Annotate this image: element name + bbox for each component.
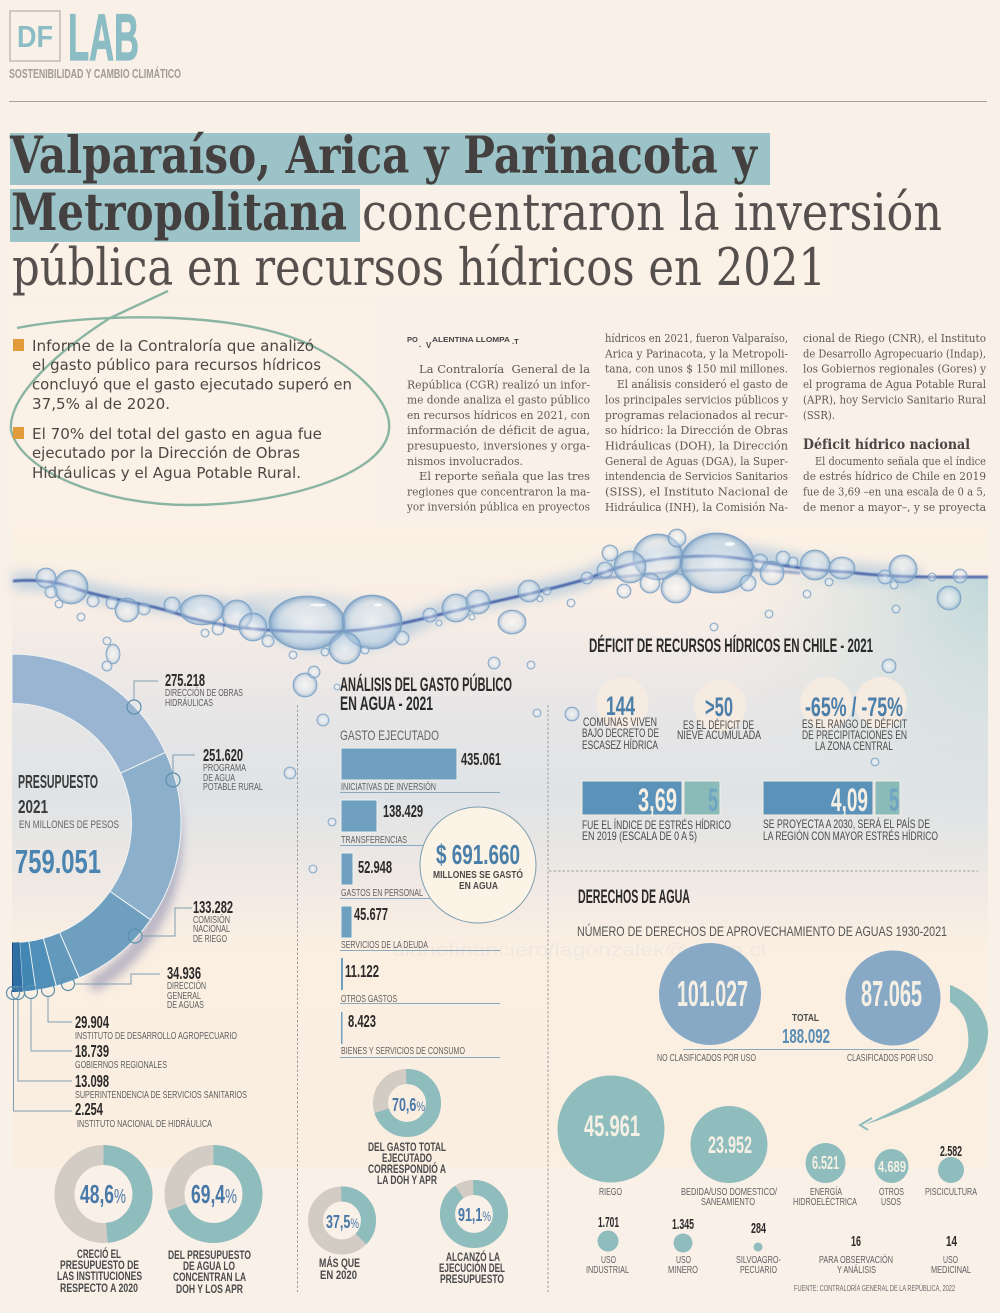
callout: Dirección General de Aguas: DE AGUAS bbox=[167, 999, 204, 1011]
callout: Superintendencia de Servicios Sanitarios bbox=[12, 986, 247, 1101]
bubble chart: water rights by use: MINERO bbox=[668, 1264, 698, 1276]
panel: déficit de recursos hídricos bbox=[582, 635, 907, 753]
chart: budget half donut: EN MILLONES DE PESOS bbox=[19, 819, 119, 831]
article column 1: . bbox=[419, 340, 421, 349]
title bbox=[9, 126, 942, 298]
article column 3: Déficit hídrico nacional bbox=[803, 437, 970, 453]
stress index bar 2019: 5 bbox=[708, 782, 718, 818]
heading: análisis del gasto público: ANÁLISIS DEL GASTO PÚBLICO bbox=[340, 674, 512, 696]
article column 1: ALENTINA LLOMPA bbox=[432, 335, 511, 344]
donut: 48,6%: 48,6% bbox=[80, 1179, 126, 1209]
bubble chart: water rights by use: USO bbox=[943, 1254, 958, 1266]
donut: 70,6%: 70,6% bbox=[392, 1095, 425, 1115]
panel: déficit de recursos hídricos: NIEVE ACUMULADA bbox=[677, 728, 761, 742]
total water rights comparison bbox=[657, 943, 940, 1064]
callout circle: total gastado: $ 691.660 bbox=[436, 839, 520, 870]
bar chart: gasto ejecutado: OTROS GASTOS bbox=[341, 993, 397, 1005]
callout circle: total gastado bbox=[420, 807, 536, 923]
bar chart: gasto ejecutado: 52.948 bbox=[358, 857, 392, 877]
donut: 91,1%: 91,1% bbox=[458, 1205, 491, 1225]
bar chart: gasto ejecutado: 45.677 bbox=[354, 904, 388, 924]
stress index bar 2030: 4,09 bbox=[831, 782, 868, 818]
stress index bar 2019: 3,69 bbox=[638, 782, 677, 818]
donut: 69,4%: CONCENTRAN LA bbox=[173, 1270, 246, 1284]
bubble chart: water rights by use: MEDICINAL bbox=[931, 1264, 971, 1276]
article column 1: me donde analiza el gasto público bbox=[407, 394, 590, 407]
article column 3: de Desarrollo Agropecuario (Indap), bbox=[803, 347, 986, 360]
callout: Comisión Nacional de Riego: 133.282 bbox=[193, 897, 233, 917]
bubble chart: water rights by use bbox=[558, 1076, 977, 1276]
article column 2: (SISS), el Instituto Nacional de bbox=[605, 486, 788, 498]
panel: déficit de recursos hídricos: >50 bbox=[705, 692, 733, 722]
donut: 48,6%: CRECIÓ EL bbox=[77, 1246, 121, 1261]
bar chart: gasto ejecutado bbox=[340, 748, 501, 1058]
bar chart: gasto ejecutado: 138.429 bbox=[383, 801, 423, 821]
bubble chart: water rights by use: 45.961 bbox=[584, 1110, 640, 1143]
chart: budget half donut: 2021 bbox=[18, 797, 48, 817]
callout: Instituto de Desarrollo Agropecuario bbox=[42, 984, 237, 1042]
donut: 48,6%: PRESUPUESTO DE bbox=[60, 1258, 139, 1272]
logo: DF LAB bbox=[9, 0, 181, 81]
total water rights comparison: TOTAL bbox=[792, 1013, 819, 1024]
bubble chart: water rights by use: 16 bbox=[851, 1233, 861, 1250]
total water rights comparison: 101.027 bbox=[677, 973, 748, 1014]
title: Valparaíso, Arica y Parinacota y bbox=[9, 126, 758, 186]
bubble chart: water rights by use: USO bbox=[601, 1254, 616, 1266]
donut: 37,5%: MÁS QUE bbox=[319, 1255, 360, 1270]
callout: Comisión Nacional de Riego: DE RIEGO bbox=[193, 933, 227, 945]
bar chart: gasto ejecutado: TRANSFERENCIAS bbox=[341, 834, 407, 846]
callout: Dirección General de Aguas: DIRECCIÓN bbox=[167, 979, 206, 992]
callout: Instituto de Desarrollo Agropecuario: INSTITUTO DE DESARROLLO AGROPECUARIO bbox=[75, 1030, 237, 1042]
donut: 70,6%: EJECUTADO bbox=[382, 1151, 432, 1165]
callout: Programa de Agua Potable Rural: PROGRAMA bbox=[203, 762, 246, 774]
summary bullets with hand-drawn ellipse: El 70% del total del gasto en agua fue bbox=[32, 425, 322, 443]
chart: budget half donut: PRESUPUESTO bbox=[18, 772, 98, 792]
bar chart: gasto ejecutado: 8.423 bbox=[348, 1011, 376, 1031]
article column 1: en recursos hídricos en 2021, con bbox=[407, 409, 590, 422]
bar chart: gasto ejecutado: 435.061 bbox=[461, 749, 501, 769]
article column 3: de estrés hídrico de Chile en 2019 bbox=[803, 470, 986, 483]
logo: DF LAB: SOSTENIBILIDAD Y CAMBIO CLIMÁTICO bbox=[9, 66, 181, 81]
donut: 91,1% bbox=[439, 1188, 505, 1286]
heading: derechos de agua: DERECHOS DE AGUA bbox=[578, 887, 690, 908]
faint watermark: diariofinanciero/lagonzalek@e-clip.cl bbox=[392, 940, 766, 960]
bar chart: gasto ejecutado: INICIATIVAS DE INVERSIÓN bbox=[341, 780, 436, 793]
callout: Comisión Nacional de Riego bbox=[128, 897, 233, 945]
total water rights comparison: CLASIFICADOS POR USO bbox=[847, 1052, 933, 1064]
callout: Dirección de Obras Hidráulicas bbox=[127, 670, 243, 714]
callout: Programa de Agua Potable Rural: POTABLE RURAL bbox=[203, 781, 263, 793]
donut: 70,6%: DEL GASTO TOTAL bbox=[368, 1140, 446, 1154]
article column 3: de menor a mayor–, y se proyecta bbox=[803, 501, 986, 514]
article column 2: intendencia de Servicios Sanitarios bbox=[605, 470, 788, 483]
article column 1: yor inversión pública en proyectos bbox=[406, 501, 590, 514]
bubble chart: water rights by use: 1.345 bbox=[672, 1216, 694, 1233]
bubble chart: water rights by use: 23.952 bbox=[708, 1132, 752, 1159]
stress index bar 2019: FUE EL ÍNDICE DE ESTRÉS HÍDRICO bbox=[582, 817, 731, 832]
callout circle: total gastado: MILLONES SE GASTÓ bbox=[433, 868, 523, 881]
bubble chart: water rights by use: SILVOAGRO- bbox=[736, 1254, 781, 1266]
stress index bar 2030: SE PROYECTA A 2030, SERÁ EL PAÍS DE bbox=[763, 816, 930, 831]
article column 1: República (CGR) realizó un infor- bbox=[407, 378, 590, 391]
callout: Instituto Nacional de Hidráulica: 2.254 bbox=[75, 1099, 103, 1119]
bubble chart: water rights by use: USO bbox=[676, 1254, 691, 1266]
summary bullets with hand-drawn ellipse: Hidráulicas y el Agua Potable Rural. bbox=[32, 464, 301, 482]
summary bullets with hand-drawn ellipse: ejecutado por la Dirección de Obras bbox=[32, 444, 300, 462]
water panel background bbox=[10, 230, 988, 1167]
article column 3: el programa de Agua Potable Rural bbox=[803, 378, 986, 391]
donut: 91,1%: ALCANZÓ LA bbox=[446, 1249, 500, 1264]
heading: análisis del gasto público: GASTO EJECUTADO bbox=[340, 727, 439, 743]
donut: 37,5% bbox=[316, 1194, 368, 1282]
callout: Instituto Nacional de Hidráulica: INSTITUTO NACIONAL DE HIDRÁULICA bbox=[77, 1117, 212, 1130]
summary bullets with hand-drawn ellipse: concluyó que el gasto ejecutado superó en bbox=[32, 376, 352, 394]
donut: 91,1%: EJECUCIÓN DEL bbox=[439, 1260, 505, 1275]
callout: Dirección de Obras Hidráulicas: 275.218 bbox=[165, 670, 205, 690]
bubble chart: water rights by use: HIDROELÉCTRICA bbox=[793, 1195, 857, 1208]
donut: 37,5%: EN 2020 bbox=[320, 1268, 357, 1282]
bubble chart: water rights by use: Y ANÁLISIS bbox=[837, 1263, 876, 1276]
article column 1: nismos involucrados. bbox=[407, 455, 523, 468]
donut: 37,5%: 37,5% bbox=[326, 1212, 359, 1232]
bubble chart: water rights by use: PARA OBSERVACIÓN bbox=[819, 1253, 893, 1266]
article column 2: tana, con unos $ 150 mil millones. bbox=[605, 363, 788, 376]
summary bullets with hand-drawn ellipse: el gasto público para recursos hídricos bbox=[32, 356, 321, 374]
callout: Dirección General de Aguas: 34.936 bbox=[167, 963, 201, 983]
article column 1: información de déficit de agua, bbox=[407, 424, 590, 437]
article column 1: El reporte señala que las tres bbox=[419, 470, 590, 483]
stress index bar 2030: 5 bbox=[889, 782, 899, 818]
article column 3: cional de Riego (CNR), el Instituto bbox=[803, 332, 986, 345]
logo: DF LAB: DF bbox=[17, 19, 53, 54]
bubble chart: water rights by use: USOS bbox=[881, 1196, 901, 1208]
donut: 70,6%: LA DOH Y APR bbox=[377, 1173, 437, 1187]
article column 2: General de Aguas (DGA), la Super- bbox=[605, 455, 788, 468]
article column 3: fue de 3,69 –en una escala de 0 a 5, bbox=[803, 486, 986, 498]
article column 2: so hídrico: la Dirección de Obras bbox=[605, 424, 788, 437]
donut: 48,6%: RESPECTO A 2020 bbox=[60, 1281, 138, 1295]
article column 1: regiones que concentraron la ma- bbox=[407, 485, 590, 498]
summary bullets with hand-drawn ellipse bbox=[11, 291, 389, 505]
summary bullets with hand-drawn ellipse: Informe de la Contraloría que analizó bbox=[32, 337, 314, 355]
panel: déficit de recursos hídricos: ESCASEZ HÍDRICA bbox=[582, 737, 658, 752]
article column 2 bbox=[604, 332, 789, 514]
callout: Gobiernos regionales: GOBIERNOS REGIONALES bbox=[75, 1059, 167, 1071]
bubble chart: water rights by use: 6.521 bbox=[812, 1153, 839, 1173]
heading: análisis del gasto público: EN AGUA - 2021 bbox=[340, 694, 433, 715]
bubble chart: water rights by use: 284 bbox=[751, 1220, 766, 1237]
summary bullets with hand-drawn ellipse: 37,5% al de 2020. bbox=[32, 395, 170, 413]
callout: Programa de Agua Potable Rural: 251.620 bbox=[203, 745, 243, 765]
total water rights comparison: NO CLASIFICADOS POR USO bbox=[657, 1052, 756, 1064]
callout: Superintendencia de Servicios Sanitarios: SUPERINTENDENCIA DE SERVICIOS SANITARIOS bbox=[75, 1089, 247, 1101]
bubble chart: water rights by use: 4.689 bbox=[878, 1159, 906, 1176]
panel: déficit de recursos hídricos: -65% / -75% bbox=[805, 692, 903, 722]
article column 2: El análisis consideró el gasto de bbox=[617, 378, 788, 391]
callout: Instituto de Desarrollo Agropecuario: 29.904 bbox=[75, 1012, 109, 1032]
article column 2: los principales servicios públicos y bbox=[605, 393, 789, 406]
callout circle: total gastado: EN AGUA bbox=[459, 880, 498, 892]
donut: 69,4%: DOH Y LOS APR bbox=[176, 1282, 243, 1296]
bubble chart: water rights by use: BEDIDA/USO DOMESTICO/ bbox=[681, 1186, 777, 1198]
bubble chart: water rights by use: PISCICULTURA bbox=[925, 1186, 977, 1198]
donut: 70,6%: CORRESPONDIÓ A bbox=[368, 1161, 446, 1176]
heading: derechos de agua bbox=[577, 887, 947, 939]
panel: déficit de recursos hídricos: 144 bbox=[606, 691, 635, 721]
callout: Dirección de Obras Hidráulicas: DIRECCIÓN DE OBRAS bbox=[165, 686, 243, 699]
callout: Superintendencia de Servicios Sanitarios: 13.098 bbox=[75, 1071, 109, 1091]
bubble chart: water rights by use: 14 bbox=[946, 1233, 957, 1250]
article column 1: La Contraloría General de la bbox=[419, 363, 590, 376]
bar chart: gasto ejecutado: GASTOS EN PERSONAL bbox=[341, 887, 423, 899]
article column 1: .T bbox=[512, 337, 519, 346]
heading: análisis del gasto público bbox=[340, 674, 512, 743]
arrow: classified breakdown bbox=[860, 985, 988, 1130]
callout: Comisión Nacional de Riego: COMISIÓN bbox=[193, 913, 230, 926]
callout: Dirección General de Aguas bbox=[62, 963, 206, 1011]
donut: 70,6% bbox=[368, 1076, 446, 1187]
bar chart: gasto ejecutado: 11.122 bbox=[345, 961, 379, 981]
panel: déficit de recursos hídricos: ES EL DÉFICIT DE bbox=[683, 717, 754, 732]
title: pública en recursos hídricos en 2021 bbox=[12, 239, 826, 298]
article column 1: presupuesto, inversiones y orga- bbox=[407, 440, 590, 452]
callout: Gobiernos regionales bbox=[24, 986, 167, 1071]
article column 1: V bbox=[426, 341, 432, 350]
bubble chart: water rights by use: 1.701 bbox=[598, 1214, 619, 1231]
callout: Instituto Nacional de Hidráulica bbox=[6, 986, 212, 1130]
donut: 69,4%: DEL PRESUPUESTO bbox=[168, 1248, 251, 1262]
bubble chart: water rights by use: SANEAMIENTO bbox=[701, 1196, 755, 1208]
donut: 91,1%: PRESUPUESTO bbox=[440, 1272, 504, 1286]
donut: 69,4%: DE AGUA LO bbox=[183, 1259, 235, 1273]
article column 2: Hidráulica (INH), la Comisión Na- bbox=[605, 501, 788, 514]
article column 2: programas relacionados al recur- bbox=[605, 409, 788, 422]
donut: 69,4% bbox=[168, 1155, 252, 1296]
article column 2: Arica y Parinacota, y la Metropoli- bbox=[604, 347, 788, 360]
stress index bar 2030 bbox=[763, 781, 938, 843]
bubble chart: water rights by use: OTROS bbox=[879, 1186, 904, 1198]
article column 1: PO bbox=[407, 335, 418, 344]
article column 1 bbox=[406, 335, 590, 514]
panel: déficit de recursos hídricos: LA ZONA CENTRAL bbox=[815, 739, 893, 753]
title: Metropolitana bbox=[11, 183, 347, 243]
article column 3 bbox=[803, 332, 987, 514]
bar chart: gasto ejecutado: SERVICIOS DE LA DEUDA bbox=[341, 939, 428, 951]
bubble chart: water rights by use: 2.582 bbox=[940, 1143, 962, 1160]
panel: déficit de recursos hídricos: COMUNAS VIVEN bbox=[583, 715, 657, 729]
chart: budget half donut: 759.051 bbox=[15, 843, 101, 880]
donut: 69,4%: 69,4% bbox=[191, 1179, 237, 1209]
bubble chart: water rights by use: PECUARIO bbox=[740, 1264, 777, 1276]
bubble chart: water rights by use: INDUSTRIAL bbox=[586, 1264, 629, 1276]
callout: Dirección General de Aguas: GENERAL bbox=[167, 990, 201, 1002]
panel: déficit de recursos hídricos: DE PRECIPITACIONES EN bbox=[802, 728, 907, 742]
callout: Gobiernos regionales: 18.739 bbox=[75, 1041, 109, 1061]
donut: 48,6% bbox=[57, 1155, 142, 1295]
donut: 48,6%: LAS INSTITUCIONES bbox=[57, 1269, 142, 1283]
article column 3: (APR), hoy Servicio Sanitario Rural bbox=[803, 393, 986, 406]
stress index bar 2019 bbox=[582, 781, 731, 843]
article column 2: Hidráulicas (DOH), la Dirección bbox=[605, 439, 788, 452]
article column 3: los Gobiernos regionales (Gores) y bbox=[803, 363, 987, 376]
panel dividers bbox=[298, 705, 978, 1292]
callout: Programa de Agua Potable Rural: DE AGUA bbox=[203, 772, 235, 784]
callout: Comisión Nacional de Riego: NACIONAL bbox=[193, 923, 230, 935]
water surface with bubbles bbox=[13, 529, 988, 873]
callout: Dirección de Obras Hidráulicas: HIDRÁULICAS bbox=[165, 696, 213, 709]
total water rights comparison: 87.065 bbox=[861, 973, 922, 1014]
bubble chart: water rights by use: ENERGÍA bbox=[810, 1185, 842, 1198]
stress index bar 2019: EN 2019 (ESCALA DE 0 A 5) bbox=[582, 829, 697, 843]
panel: déficit de recursos hídricos: BAJO DECRETO DE bbox=[582, 726, 659, 740]
total water rights comparison: 188.092 bbox=[782, 1026, 830, 1048]
bubble chart: water rights by use: RIEGO bbox=[599, 1186, 622, 1198]
article column 3: (SSR). bbox=[803, 409, 835, 422]
panel: déficit de recursos hídricos: ES EL RANGO DE DÉFICIT bbox=[802, 716, 907, 731]
logo: DF LAB: LAB bbox=[68, 0, 139, 74]
article column 2: hídricos en 2021, fueron Valparaíso, bbox=[605, 332, 788, 345]
chart: budget half donut bbox=[12, 654, 181, 992]
bar chart: gasto ejecutado: BIENES Y SERVICIOS DE CONSUMO bbox=[341, 1045, 465, 1057]
callout: Programa de Agua Potable Rural bbox=[166, 745, 263, 793]
